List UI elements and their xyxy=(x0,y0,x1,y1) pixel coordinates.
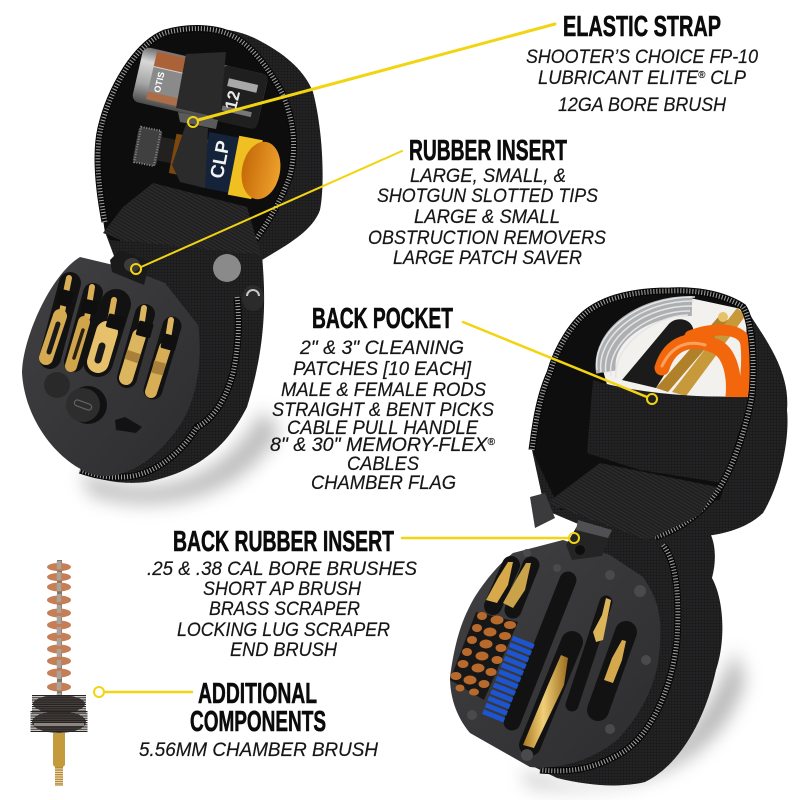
text block: elastic strap: CLP xyxy=(705,68,746,89)
upper pouch zipper xyxy=(98,29,294,256)
soft shadow under second pouch xyxy=(520,650,745,789)
text block: rubber insert: RUBBER INSERT xyxy=(409,135,567,167)
text block: elastic strap: SHOOTER’S CHOICE FP-10 xyxy=(526,47,758,68)
copper bore brushes xyxy=(450,612,516,696)
text block: back rubber insert: .25 & .38 CAL BORE BRUSHES xyxy=(147,559,417,580)
text block: back rubber insert: END BRUSH xyxy=(230,640,337,661)
twisted wire overlay xyxy=(57,561,61,734)
text block: back rubber insert: BACK RUBBER INSERT xyxy=(173,526,394,558)
back rubber insert plate xyxy=(450,540,660,768)
product: open pouch with lubricant bottles and rubber insert xyxy=(22,28,323,504)
round plugs and slot xyxy=(44,372,142,433)
blue nylon brush xyxy=(492,640,524,720)
text block: back pocket: 8" & 30" MEMORY-FLEX xyxy=(270,435,481,456)
upper pouch interior xyxy=(98,29,294,256)
lubricant bottle: CLP xyxy=(207,139,235,180)
orange chamber flag xyxy=(662,330,747,397)
second fabric flap xyxy=(547,463,717,540)
steel bristles xyxy=(32,695,86,733)
silver snap and zipper pull xyxy=(213,254,264,311)
copper bristle stack xyxy=(47,563,71,692)
side clip block xyxy=(530,493,555,528)
zipper around back insert xyxy=(540,545,678,771)
text block: back pocket: CHAMBER FLAG xyxy=(311,473,456,494)
text block: rubber insert: OBSTRUCTION REMOVERS xyxy=(368,228,606,249)
glass vial with 12ga bore brush: 12 xyxy=(221,89,244,112)
brass tool pieces xyxy=(486,562,626,748)
lower shell behind back insert xyxy=(520,500,722,785)
callout leader: rubber insert xyxy=(131,151,402,274)
lower shell behind rubber insert xyxy=(80,240,264,483)
callout leader: back pocket xyxy=(463,322,657,404)
text block: back pocket: BACK POCKET xyxy=(312,303,453,335)
black rubber collars xyxy=(56,288,179,352)
second pouch interior xyxy=(532,291,753,510)
rubber insert plate xyxy=(22,257,200,476)
back pocket front panel xyxy=(587,380,750,483)
product: back pocket pouch and back rubber insert xyxy=(450,288,788,789)
text block: rubber insert: LARGE, SMALL, & xyxy=(410,166,566,187)
text block: back pocket: PATCHES [10 EACH] xyxy=(293,359,472,380)
brass collar xyxy=(53,733,65,768)
text block: back pocket xyxy=(270,303,496,494)
text block: additional components: COMPONENTS xyxy=(190,706,326,738)
product: 5.56mm chamber brush xyxy=(32,560,86,786)
fabric flap xyxy=(103,183,262,285)
elastic strap, top xyxy=(176,52,226,118)
cable pull handle xyxy=(622,319,693,388)
brass rods xyxy=(656,308,746,396)
callout leader: back rubber insert xyxy=(402,533,579,543)
text block: rubber insert xyxy=(368,135,606,269)
text block: back rubber insert xyxy=(147,526,417,661)
text block: back rubber insert: SHORT AP BRUSH xyxy=(203,579,361,600)
text block: elastic strap xyxy=(526,11,758,116)
text block: rubber insert: LARGE PATCH SAVER xyxy=(393,248,582,269)
text block: rubber insert: LARGE & SMALL xyxy=(414,207,560,228)
hinge clip xyxy=(110,250,150,285)
text block: back rubber insert: LOCKING LUG SCRAPER xyxy=(177,620,390,641)
text block: back pocket: 2" & 3" CLEANING xyxy=(299,338,464,359)
brass slotted tips and obstruction removers xyxy=(46,278,171,392)
glass vial with 12ga bore brush: OTIS xyxy=(152,71,167,94)
text block: elastic strap: ® xyxy=(698,70,706,81)
second pouch shell xyxy=(532,288,788,550)
text block: elastic strap: 12GA BORE BRUSH xyxy=(558,95,726,116)
second pouch zipper xyxy=(532,291,753,537)
white patch pack xyxy=(600,298,748,397)
text block: additional components: 5.56MM CHAMBER BRUSH xyxy=(139,740,378,761)
hinge clip on back insert xyxy=(566,520,612,560)
text block: additional components xyxy=(139,678,378,761)
text block: back rubber insert: BRASS SCRAPER xyxy=(209,599,360,620)
threaded tip xyxy=(55,767,63,786)
elastic strap, bottom xyxy=(172,124,208,188)
zipper around rubber insert xyxy=(80,297,238,477)
strap anchor tab xyxy=(178,112,218,129)
soft shadow under pouch xyxy=(80,410,280,504)
tool recesses xyxy=(450,565,626,745)
text block: rubber insert: SHOTGUN SLOTTED TIPS xyxy=(377,186,598,207)
glass vial with 12ga bore brush xyxy=(131,46,269,130)
callout leader: additional components xyxy=(94,687,192,697)
lubricant bottle xyxy=(130,117,285,204)
text block: elastic strap: ELASTIC STRAP xyxy=(563,11,721,43)
wire shaft core xyxy=(57,560,62,735)
text block: back pocket: CABLE PULL HANDLE xyxy=(287,418,478,439)
text block: back pocket: MALE & FEMALE RODS xyxy=(281,380,486,401)
recesses for brass tips xyxy=(50,283,172,390)
text block: back pocket: STRAIGHT & BENT PICKS xyxy=(272,400,494,421)
memory-flex cable coil xyxy=(597,297,695,378)
upper pouch shell xyxy=(98,28,323,300)
text block: back pocket: ® xyxy=(487,437,496,448)
callout leader: elastic strap xyxy=(188,24,555,127)
plate studs xyxy=(467,549,651,761)
text block: elastic strap: LUBRICANT ELITE xyxy=(538,68,704,89)
text block: back pocket: CABLES xyxy=(347,454,419,475)
text block: additional components: ADDITIONAL xyxy=(198,678,317,710)
